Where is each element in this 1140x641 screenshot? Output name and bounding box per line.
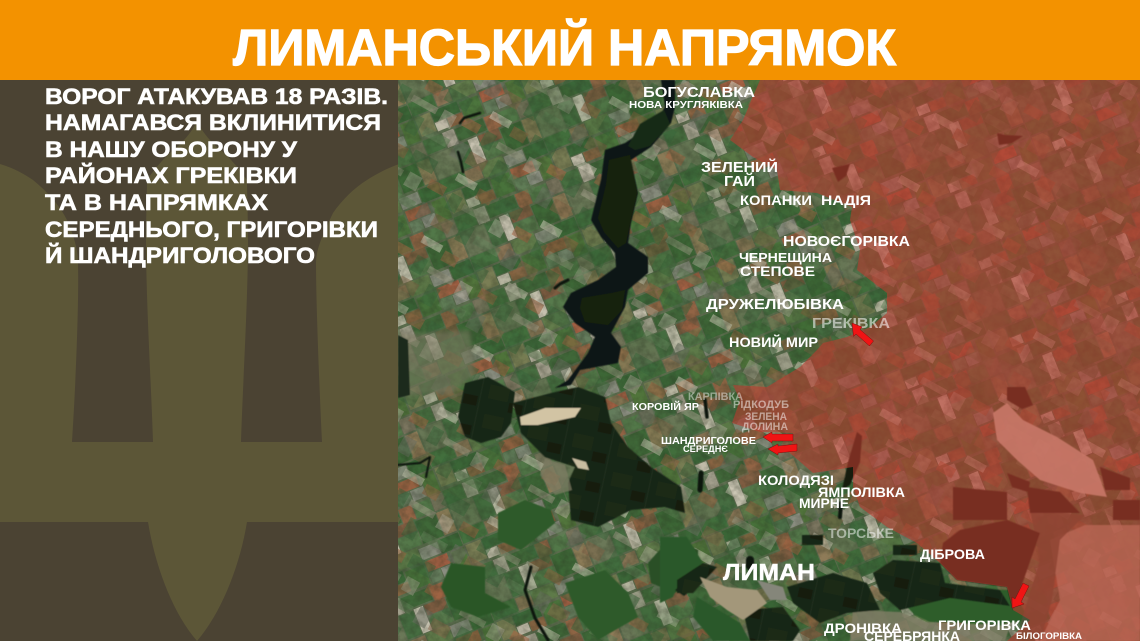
- arrow: Serednie attack: [768, 444, 797, 455]
- map place labels: БОГУСЛАВКА: [643, 84, 755, 101]
- map place labels: БІЛОГОРІВКА: [1016, 631, 1083, 641]
- map place labels: ЗЕЛЕНА: [745, 411, 787, 423]
- map place labels: ДРУЖЕЛЮБІВКА: [706, 296, 844, 313]
- text block: attack summary: [45, 84, 388, 268]
- text block: attack summary: Й ШАНДРИГОЛОВОГО: [45, 243, 315, 268]
- arrow: Hrekivka attack: [852, 323, 874, 346]
- map place labels: ЯМПОЛІВКА: [818, 484, 905, 500]
- text block: attack summary: В НАШУ ОБОРОНУ У: [45, 137, 298, 162]
- text block: attack summary: РАЙОНАХ ГРЕКІВКИ: [45, 163, 297, 188]
- map place labels: ЛИМАН: [723, 559, 815, 585]
- map place labels: МИРНЕ: [799, 495, 849, 511]
- icon: trident emblem: [0, 122, 399, 641]
- map place labels: ГРЕКІВКА: [812, 315, 890, 332]
- map place labels: КОРОВІЙ ЯР: [632, 400, 699, 413]
- map place labels: ДРОНІВКА: [824, 620, 902, 636]
- map: sand and town patches: [520, 408, 581, 425]
- map place labels: ШАНДРИГОЛОВЕ: [661, 435, 756, 447]
- map: reservoir water: [555, 80, 675, 388]
- map: pine forests: [458, 377, 1010, 641]
- text block: attack summary: ТА В НАПРЯМКАХ: [45, 190, 268, 215]
- map place labels: НАДІЯ: [821, 192, 871, 208]
- map place labels: ГРИГОРІВКА: [938, 617, 1031, 633]
- map place labels: СЕРЕДНЄ: [683, 444, 729, 454]
- map: occupied-side land features: [832, 133, 1140, 641]
- arrow: Hryhorivka attack: [1012, 583, 1029, 608]
- map place labels: ЗЕЛЕНИЙ: [701, 158, 778, 176]
- text block: attack summary: СЕРЕДНЬОГО, ГРИГОРІВКИ: [45, 217, 378, 242]
- map place labels: КАРПІВКА: [688, 391, 743, 403]
- arrow: Shandryholove attack: [763, 432, 793, 443]
- map place labels: РІДКОДУБ: [733, 399, 789, 411]
- map place labels: КОПАНКИ: [740, 193, 812, 208]
- map place labels: ГАЙ: [724, 172, 755, 190]
- title: ЛИМАНСЬКИЙ НАПРЯМОК: [233, 18, 897, 76]
- text block: attack summary: ВОРОГ АТАКУВАВ 18 РАЗІВ.: [45, 84, 388, 109]
- map: occupied territory overlay: [730, 80, 1140, 641]
- map: land cover: [398, 330, 1030, 641]
- title bar: [0, 0, 1140, 80]
- map place labels: ДІБРОВА: [920, 546, 985, 562]
- text block: attack summary: НАМАГАВСЯ ВКЛИНИТИСЯ: [45, 110, 381, 135]
- map place labels: КОЛОДЯЗІ: [758, 472, 834, 488]
- map place labels: НОВИЙ МИР: [729, 335, 818, 350]
- map place labels: ЧЕРНЕЩИНА: [739, 250, 833, 265]
- map: streams and ponds: [398, 113, 841, 640]
- map place labels: СТЕПОВЕ: [740, 263, 815, 279]
- map place labels: ДОЛИНА: [742, 421, 788, 433]
- map place labels: [629, 84, 1083, 641]
- map place labels: ТОРСЬКЕ: [828, 525, 894, 541]
- map place labels: НОВОЄГОРІВКА: [783, 234, 911, 250]
- panel: satellite map: [398, 80, 1140, 641]
- panel: left background: [0, 80, 399, 641]
- map place labels: НОВА КРУГЛЯКІВКА: [629, 99, 743, 111]
